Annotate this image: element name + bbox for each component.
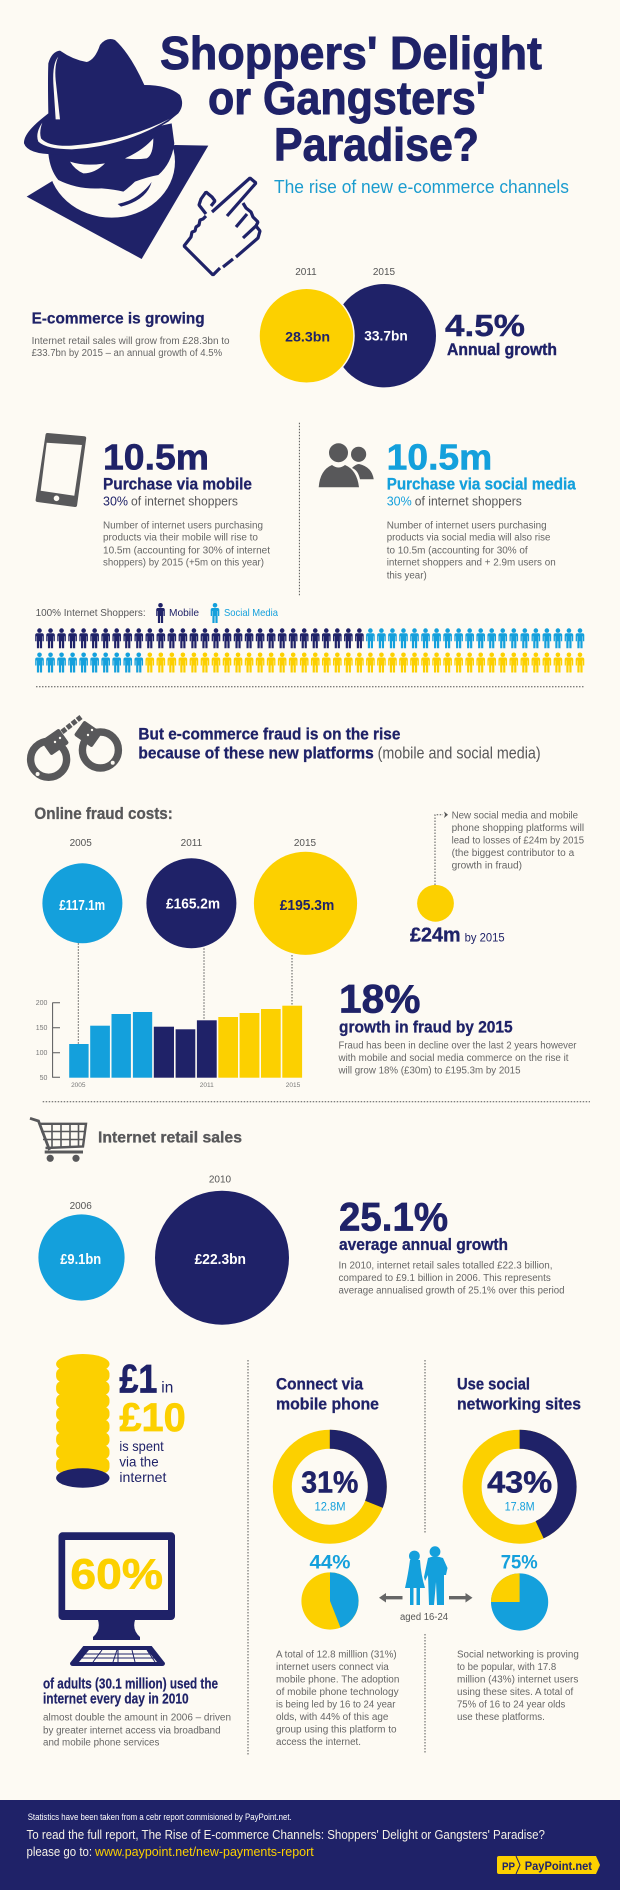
chart: overlapping growth circles: 2011 (295, 267, 317, 278)
stat: 10.5m mobile: of internet shoppers (131, 495, 238, 509)
text block: mobile description: 10.5m (accounting for 30% of internet (103, 545, 270, 556)
text block: mobile phone description: mobile phone. The adoption (276, 1674, 399, 1685)
chart: fraud cost circles: £165.2m (166, 896, 220, 913)
chart: fraud bar chart: 2011 (200, 1082, 214, 1089)
text block: mobile phone description: olds, with 44% of this age (276, 1712, 389, 1723)
text block: adults online every day: of adults (30.1 million) used the (43, 1675, 218, 1692)
heading: use social networking sites: networking sites (457, 1394, 581, 1413)
chart: fraud cost circles: £117.1m (59, 897, 105, 914)
stat: 18% growth in fraud: 18% (339, 977, 420, 1021)
icon: masked gangster in hat (24, 39, 208, 259)
icon: young couple aged 16-24 (400, 1546, 448, 1623)
chart: retail sales circles: £22.3bn (195, 1251, 246, 1268)
chart: donut 31%: 12.8M (314, 1500, 346, 1514)
panel: internet retail sales (30, 1118, 564, 1325)
text block: adults online every day: by greater internet access via broadband (43, 1725, 221, 1736)
text block: mobile phone description: of mobile phone technology (276, 1687, 399, 1698)
stat: 10.5m social media: 30% (387, 495, 412, 509)
stat: 4.5% annual growth (445, 308, 557, 359)
panel: purchase via social media (319, 436, 576, 581)
panel: online fraud costs (34, 804, 585, 1089)
chart: fraud bar chart: 200 (36, 1000, 47, 1007)
stat: 25.1% average annual growth: compared to £9.1 billion in 2006. This represents (338, 1273, 551, 1284)
text block: mobile phone description: internet users connect via (276, 1662, 389, 1673)
heading: fraud is on the rise: But e-commerce fraud is on the rise (138, 724, 400, 743)
icon: two people (319, 443, 374, 487)
text block: mobile description (103, 520, 270, 569)
chart: overlapping growth circles: 33.7bn (364, 328, 408, 344)
chart: fraud bar chart: 2005 (71, 1082, 86, 1089)
footer: report link: please go to: (26, 1844, 92, 1859)
section: e-commerce is growing (32, 267, 557, 387)
text block: adults online every day: internet every day in 2010 (43, 1690, 189, 1707)
stat: £1 in £10 spent online: via the (119, 1454, 159, 1470)
stat: 10.5m mobile: Purchase via mobile (103, 474, 252, 493)
footer: report link: www.paypoint.net/new-payments-report (94, 1844, 314, 1859)
icon: computer with 60% (58, 1532, 175, 1666)
text block: social networking description: 75% of 16 to 24 year olds (457, 1700, 565, 1711)
text block: social networking description: using these sites. A total of (457, 1687, 573, 1698)
logo: PayPoint.net: PP (502, 1861, 515, 1873)
chart: pie 75% aged 16-24 (491, 1552, 548, 1631)
stat: 18% growth in fraud (338, 977, 577, 1076)
text block: social media description: this year) (387, 570, 427, 581)
heading: fraud is on the rise: because of these new platforms (138, 743, 374, 762)
callout: social and mobile losses: New social media and mobile (452, 810, 579, 821)
callout: social and mobile losses: phone shopping platforms will (452, 823, 584, 834)
icon: young couple aged 16-24: aged 16-24 (400, 1612, 448, 1623)
chart: fraud bar chart: 50 (40, 1075, 47, 1082)
stat: 18% growth in fraud: growth in fraud by 2015 (339, 1017, 513, 1036)
heading: fraud is on the rise: (mobile and social media) (378, 743, 541, 762)
stat: £1 in £10 spent online (119, 1358, 186, 1485)
chart: fraud bar chart (36, 1000, 302, 1089)
stat: £1 in £10 spent online: internet (119, 1469, 167, 1485)
callout: social and mobile losses: lead to losses of £24m by 2015 (452, 835, 585, 846)
title: Paradise? (274, 119, 479, 171)
text block: mobile phone description (276, 1649, 399, 1748)
panel: use social networking sites (457, 1374, 581, 1723)
text block: social networking description (457, 1649, 579, 1723)
chart: fraud bar chart: 150 (36, 1025, 47, 1032)
text block: mobile phone description: A total of 12.8 milllion (31%) (276, 1649, 397, 1660)
stat: 10.5m social media: Purchase via social media (387, 474, 576, 493)
text block: growth description: Internet retail sales will grow from £28.3bn to (32, 336, 230, 347)
stat: 10.5m mobile: 10.5m (103, 436, 209, 477)
title: or Gangsters' (208, 72, 486, 124)
text block: growth description (32, 336, 230, 359)
chart: fraud bar chart: 2015 (286, 1082, 301, 1089)
chart: fraud cost circles: £195.3m (280, 897, 334, 914)
chart: pie 44% aged 16-24: 44% (310, 1552, 351, 1573)
text block: social networking description: use these platforms. (457, 1712, 545, 1723)
title (160, 27, 542, 171)
heading: connect via mobile phone: Connect via (276, 1374, 363, 1393)
chart: donut 31% (282, 1439, 377, 1534)
chart: pie 44% aged 16-24 (301, 1552, 359, 1630)
heading: connect via mobile phone (276, 1374, 379, 1413)
legend: internet shoppers (36, 603, 278, 623)
text block: mobile description: products via their mobile will rise to (103, 533, 258, 544)
text block: mobile description: Number of internet users purchasing (103, 520, 263, 531)
icon: handcuffs (31, 717, 118, 777)
callout: social and mobile losses (410, 810, 585, 947)
chart: fraud cost circles: 2011 (181, 838, 203, 849)
arrow (444, 812, 448, 818)
text block: adults online every day: and mobile phone services (43, 1738, 159, 1749)
chart: pictogram of 100 internet shoppers (35, 628, 584, 672)
chart: donut 31%: 31% (301, 1465, 358, 1500)
footer: report link (26, 1827, 545, 1859)
stat: 10.5m mobile: 30% (103, 495, 128, 509)
chart: overlapping growth circles: 2015 (373, 267, 396, 278)
text block: social media description (387, 520, 556, 581)
stat: 10.5m social media (387, 436, 576, 509)
text block: mobile description: shoppers) by 2015 (+5m on this year) (103, 558, 264, 569)
stat: 18% growth in fraud: with mobile and social media commerce on the rise it (338, 1053, 569, 1064)
heading: use social networking sites (457, 1374, 581, 1413)
callout: social and mobile losses: by 2015 (465, 931, 505, 945)
legend: internet shoppers: Social Media (224, 607, 278, 619)
chart: retail sales circles (38, 1175, 289, 1325)
heading: e-commerce is growing: E-commerce is growing (32, 310, 205, 327)
stat: £1 in £10 spent online: is spent (119, 1438, 164, 1454)
stat: 18% growth in fraud: Fraud has been in decline over the last 2 years however (338, 1040, 577, 1051)
stat: £1 in £10 spent online: £1 (119, 1358, 157, 1402)
text block: adults online every day: almost double the amount in 2006 – driven (43, 1713, 231, 1724)
text block: social media description: products via social media will also rise (387, 533, 551, 544)
arrow: right to social pie (449, 1593, 472, 1602)
logo: PayPoint.net (497, 1856, 600, 1874)
callout: social and mobile losses: growth in fraud) (452, 860, 522, 871)
stat: 25.1% average annual growth (338, 1196, 564, 1296)
text block: social media description: internet shoppers and + 2.9m users on (387, 558, 556, 569)
stat: £1 in £10 spent online: in (161, 1380, 173, 1397)
callout: social and mobile losses: £24m (410, 925, 461, 947)
stat: 4.5% annual growth: Annual growth (447, 340, 557, 359)
text block: mobile phone description: is being led by 16 to 24 year (276, 1700, 396, 1711)
legend: internet shoppers: 100% Internet Shoppers: (36, 607, 146, 619)
text block: adults online every day (43, 1675, 231, 1749)
heading: connect via mobile phone: mobile phone (276, 1394, 379, 1413)
arrow: left to mobile pie (379, 1593, 402, 1602)
icon: computer with 60%: 60% (70, 1550, 163, 1598)
stat: 25.1% average annual growth: average annualised growth of 25.1% over this period (338, 1285, 564, 1296)
chart: fraud bar chart: 100 (36, 1050, 47, 1057)
title: Shoppers' Delight (160, 27, 542, 79)
text block: mobile phone description: group using this platform to (276, 1725, 397, 1736)
chart: donut 43%: 43% (487, 1465, 552, 1500)
stat: 18% growth in fraud: will grow 18% (£30m) to £195.3m by 2015 (338, 1065, 521, 1076)
stat: 10.5m social media: 10.5m (387, 436, 492, 477)
stat: 25.1% average annual growth: average annual growth (339, 1235, 508, 1254)
stat: 10.5m social media: of internet shoppers (415, 495, 522, 509)
heading: fraud is on the rise (138, 724, 541, 762)
footer band (0, 1800, 620, 1890)
chart: retail sales circles: 2006 (70, 1201, 92, 1212)
panel: purchase via mobile (38, 435, 270, 569)
chart: fraud cost circles (42, 838, 357, 955)
chart: fraud cost circles: 2005 (70, 838, 92, 849)
stat: 25.1% average annual growth: 25.1% (339, 1196, 448, 1240)
chart: retail sales circles: £9.1bn (60, 1251, 101, 1268)
icon: pixel hand cursor (184, 178, 260, 275)
text block: growth description: £33.7bn by 2015 – an annual growth of 4.5% (32, 348, 222, 359)
heading: internet retail sales: Internet retail sales (98, 1129, 242, 1146)
chart: overlapping growth circles (259, 267, 436, 387)
text block: social media description: Number of internet users purchasing (387, 520, 547, 531)
text block: social networking description: million (43%) internet users (457, 1674, 578, 1685)
heading: use social networking sites: Use social (457, 1374, 530, 1393)
subtitle: The rise of new e-commerce channels (274, 176, 569, 197)
text block: social media description: to 10.5m (accounting for 30% of (387, 545, 528, 556)
stat: 25.1% average annual growth: In 2010, internet retail sales totalled £22.3 billion, (338, 1260, 552, 1271)
logo: PayPoint.net: PayPoint.net (525, 1859, 592, 1873)
text block: social networking description: Social networking is proving (457, 1649, 579, 1660)
icon: smartphone (38, 435, 84, 505)
chart: donut 43% (472, 1439, 567, 1534)
callout: social and mobile losses: (the biggest contributor to a (452, 848, 575, 859)
chart: fraud cost circles: 2015 (294, 838, 317, 849)
heading: online fraud costs: Online fraud costs: (34, 804, 173, 823)
chart: pie 75% aged 16-24: 75% (501, 1552, 538, 1573)
chart: retail sales circles: 2010 (209, 1175, 232, 1186)
chart: donut 43%: 17.8M (505, 1500, 535, 1514)
text block: mobile phone description: access the internet. (276, 1737, 361, 1748)
icon: shopping cart (30, 1118, 86, 1162)
legend: internet shoppers: Mobile (169, 607, 199, 619)
footer: report link: To read the full report, The Rise of E-commerce Channels: Shoppers' Delight or Gangsters' Paradise? (26, 1827, 545, 1842)
footer: source note: Statistics have been taken from a cebr report commisioned by PayPoint.net. (28, 1812, 292, 1823)
panel: connect via mobile phone (276, 1374, 399, 1748)
text block: social networking description: to be popular, with 17.8 (457, 1662, 557, 1673)
stat: 4.5% annual growth: 4.5% (445, 308, 525, 343)
stat: 10.5m mobile (103, 436, 252, 509)
icon: stack of coins (56, 1354, 110, 1488)
stat: £1 in £10 spent online: £10 (119, 1396, 186, 1440)
chart: overlapping growth circles: 28.3bn (285, 329, 330, 345)
